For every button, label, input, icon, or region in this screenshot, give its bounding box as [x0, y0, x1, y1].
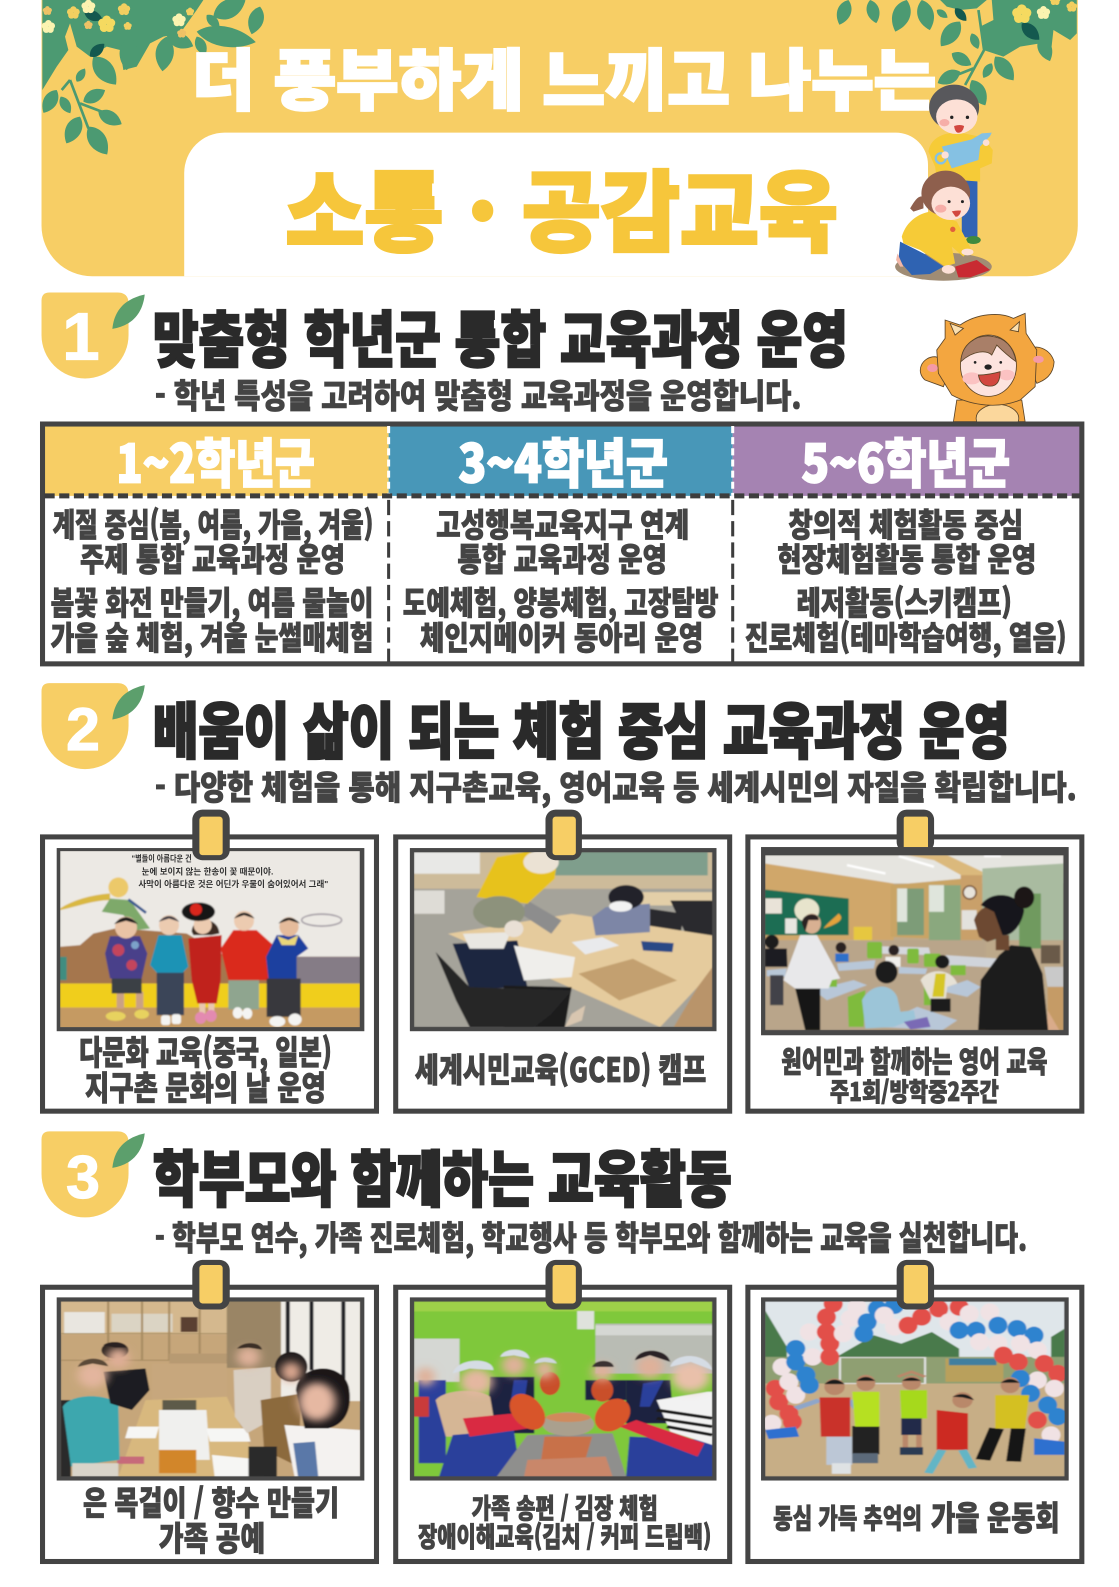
column text: grade 5-6: 현장체험활동 통합 운영	[777, 534, 1036, 581]
title line 2: 소통 · 공감교육	[285, 143, 838, 270]
heading 3: 학부모와 함께하는 교육활동	[153, 1132, 732, 1219]
photo: kimchi making	[410, 1297, 717, 1481]
photo: family crafts	[57, 1297, 364, 1481]
column text: grade 5-6: 창의적 체험활동 중심	[788, 499, 1023, 546]
icon: child in lion costume	[920, 313, 1054, 432]
photo: classroom with native teacher	[761, 847, 1069, 1035]
badge 3: 3	[66, 1143, 100, 1211]
section 1 heading	[42, 292, 848, 418]
caption	[418, 1486, 711, 1554]
label: 3~4학년군: 3~4학년군	[458, 423, 668, 499]
caption: 가족 송편 / 김장 체험	[472, 1486, 658, 1526]
header: grade 5-6	[733, 426, 1080, 496]
clip	[192, 1260, 230, 1310]
photo: students around a table	[410, 848, 717, 1031]
column text: grade 5-6: 레저활동(스키캠프)	[796, 577, 1012, 624]
leaves: top left	[38, 0, 267, 159]
caption: 세계시민교육(GCED) 캠프	[415, 1043, 706, 1092]
card: silver necklace and perfume	[43, 1260, 376, 1561]
caption: 은 목걸이 / 향수 만들기	[83, 1476, 339, 1525]
clip	[897, 810, 934, 852]
caption	[773, 1491, 1060, 1540]
photo: children in traditional costumes	[57, 848, 364, 1031]
caption: 동심 가득 추억의	[773, 1496, 922, 1536]
column text: grade 5-6	[745, 499, 1067, 660]
caption	[79, 1026, 332, 1110]
column text: grade 3-4: 통합 교육과정 운영	[457, 534, 667, 581]
table frame	[43, 424, 1082, 664]
column text: grade 1-2: 주제 통합 교육과정 운영	[80, 534, 345, 581]
column text: grade 1-2: 가을 숲 체험, 겨울 눈썰매체험	[51, 613, 373, 660]
caption: 주1회/방학중2주간	[830, 1073, 999, 1109]
clip	[545, 1260, 582, 1310]
caption	[83, 1476, 339, 1560]
caption: 장애이해교육(김치 / 커피 드립백)	[418, 1514, 711, 1554]
card: English with native speaker	[748, 810, 1082, 1111]
column text: grade 1-2: 봄꽃 화전 만들기, 여름 물놀이	[51, 577, 373, 624]
photo: children in traditional costumes: 사막이 아름다운 것은 어딘가 우물이 숨어있어서 그래"	[138, 878, 328, 889]
badge 3	[42, 1131, 145, 1217]
photo: children in traditional costumes: "별들이 아름다운 건	[132, 853, 192, 864]
photo: balloon arch and children	[761, 1295, 1069, 1481]
caption: 가족 공예	[159, 1511, 265, 1560]
column text: grade 3-4: 체인지메이커 동아리 운영	[420, 613, 703, 660]
photo: children in traditional costumes: 눈에 보이지 않는 한송이 꽃 때문이야.	[142, 865, 273, 876]
header banner	[38, 0, 1078, 281]
title line 1: 더 풍부하게 느끼고 나누는	[192, 28, 936, 123]
caption: 다문화 교육(중국, 일본)	[79, 1026, 332, 1075]
subheading 1: - 학년 특성을 고려하여 맞춤형 교육과정을 운영합니다.	[155, 369, 802, 418]
badge 2	[42, 683, 145, 769]
column text: grade 3-4: 고성행복교육지구 연계	[436, 499, 689, 546]
icon: boy with watering can	[928, 85, 993, 244]
heading 1: 맞춤형 학년군 통합 교육과정 운영	[153, 292, 848, 379]
caption	[781, 1038, 1047, 1109]
section 3 heading	[42, 1131, 1027, 1260]
card: songpyeon and kimchi	[396, 1260, 730, 1561]
panel: grade curriculum table	[43, 423, 1082, 664]
clip	[192, 810, 230, 860]
label: 5~6학년군: 5~6학년군	[802, 423, 1010, 499]
badge 2: 2	[66, 695, 100, 763]
caption: 가을 운동회	[931, 1491, 1060, 1540]
label: 1~2학년군: 1~2학년군	[116, 423, 315, 499]
leaves: top right	[833, 0, 1077, 109]
badge 1	[42, 292, 145, 378]
card: global citizenship camp	[396, 810, 730, 1111]
column text: grade 1-2	[51, 499, 373, 660]
caption: 지구촌 문화의 날 운영	[85, 1061, 326, 1110]
banner background	[42, 0, 1078, 276]
clip	[897, 1260, 934, 1310]
header: grade 3-4	[389, 426, 733, 496]
badge 1: 1	[62, 300, 100, 374]
white title tab	[184, 133, 928, 276]
card: autumn sports day	[748, 1260, 1082, 1561]
column text: grade 3-4	[403, 499, 719, 660]
clip	[545, 810, 582, 860]
header: grade 1-2	[45, 426, 389, 496]
section 2 heading	[42, 683, 1077, 809]
card: multicultural education	[43, 810, 376, 1111]
column text: grade 1-2: 계절 중심(봄, 여름, 가을, 겨울)	[53, 499, 373, 546]
column text: grade 3-4: 도예체험, 양봉체험, 고장탐방	[403, 577, 719, 624]
icon: girl kneeling	[895, 171, 992, 281]
